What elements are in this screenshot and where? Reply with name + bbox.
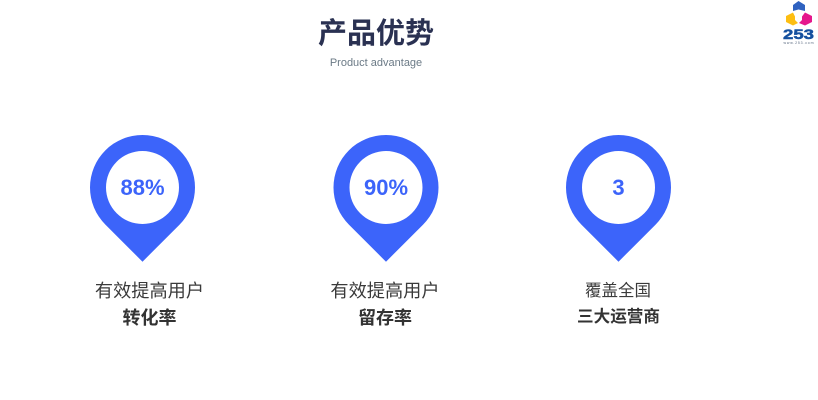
icon: 253 logo: www.253.com bbox=[784, 41, 814, 45]
label bold: retention rate: 留存率 bbox=[358, 308, 412, 328]
label bold: three major carriers: 三大运营商 bbox=[577, 307, 660, 326]
icon: 253 logo: 253 bbox=[783, 26, 814, 42]
icon: 253 logo bbox=[783, 1, 814, 45]
label: conversion rate: 有效提高用户 bbox=[95, 281, 204, 301]
pin value: 88%: 88% bbox=[120, 175, 165, 200]
label: retention rate: 有效提高用户 bbox=[330, 281, 440, 301]
pin value: 90%: 90% bbox=[364, 175, 408, 200]
label bold: conversion rate: 转化率 bbox=[122, 308, 176, 328]
pin value: 3: 3 bbox=[612, 175, 625, 200]
label: nationwide coverage: 覆盖全国 bbox=[585, 282, 651, 300]
subtitle: Product advantage bbox=[330, 57, 422, 69]
title: 产品优势 bbox=[318, 18, 434, 50]
